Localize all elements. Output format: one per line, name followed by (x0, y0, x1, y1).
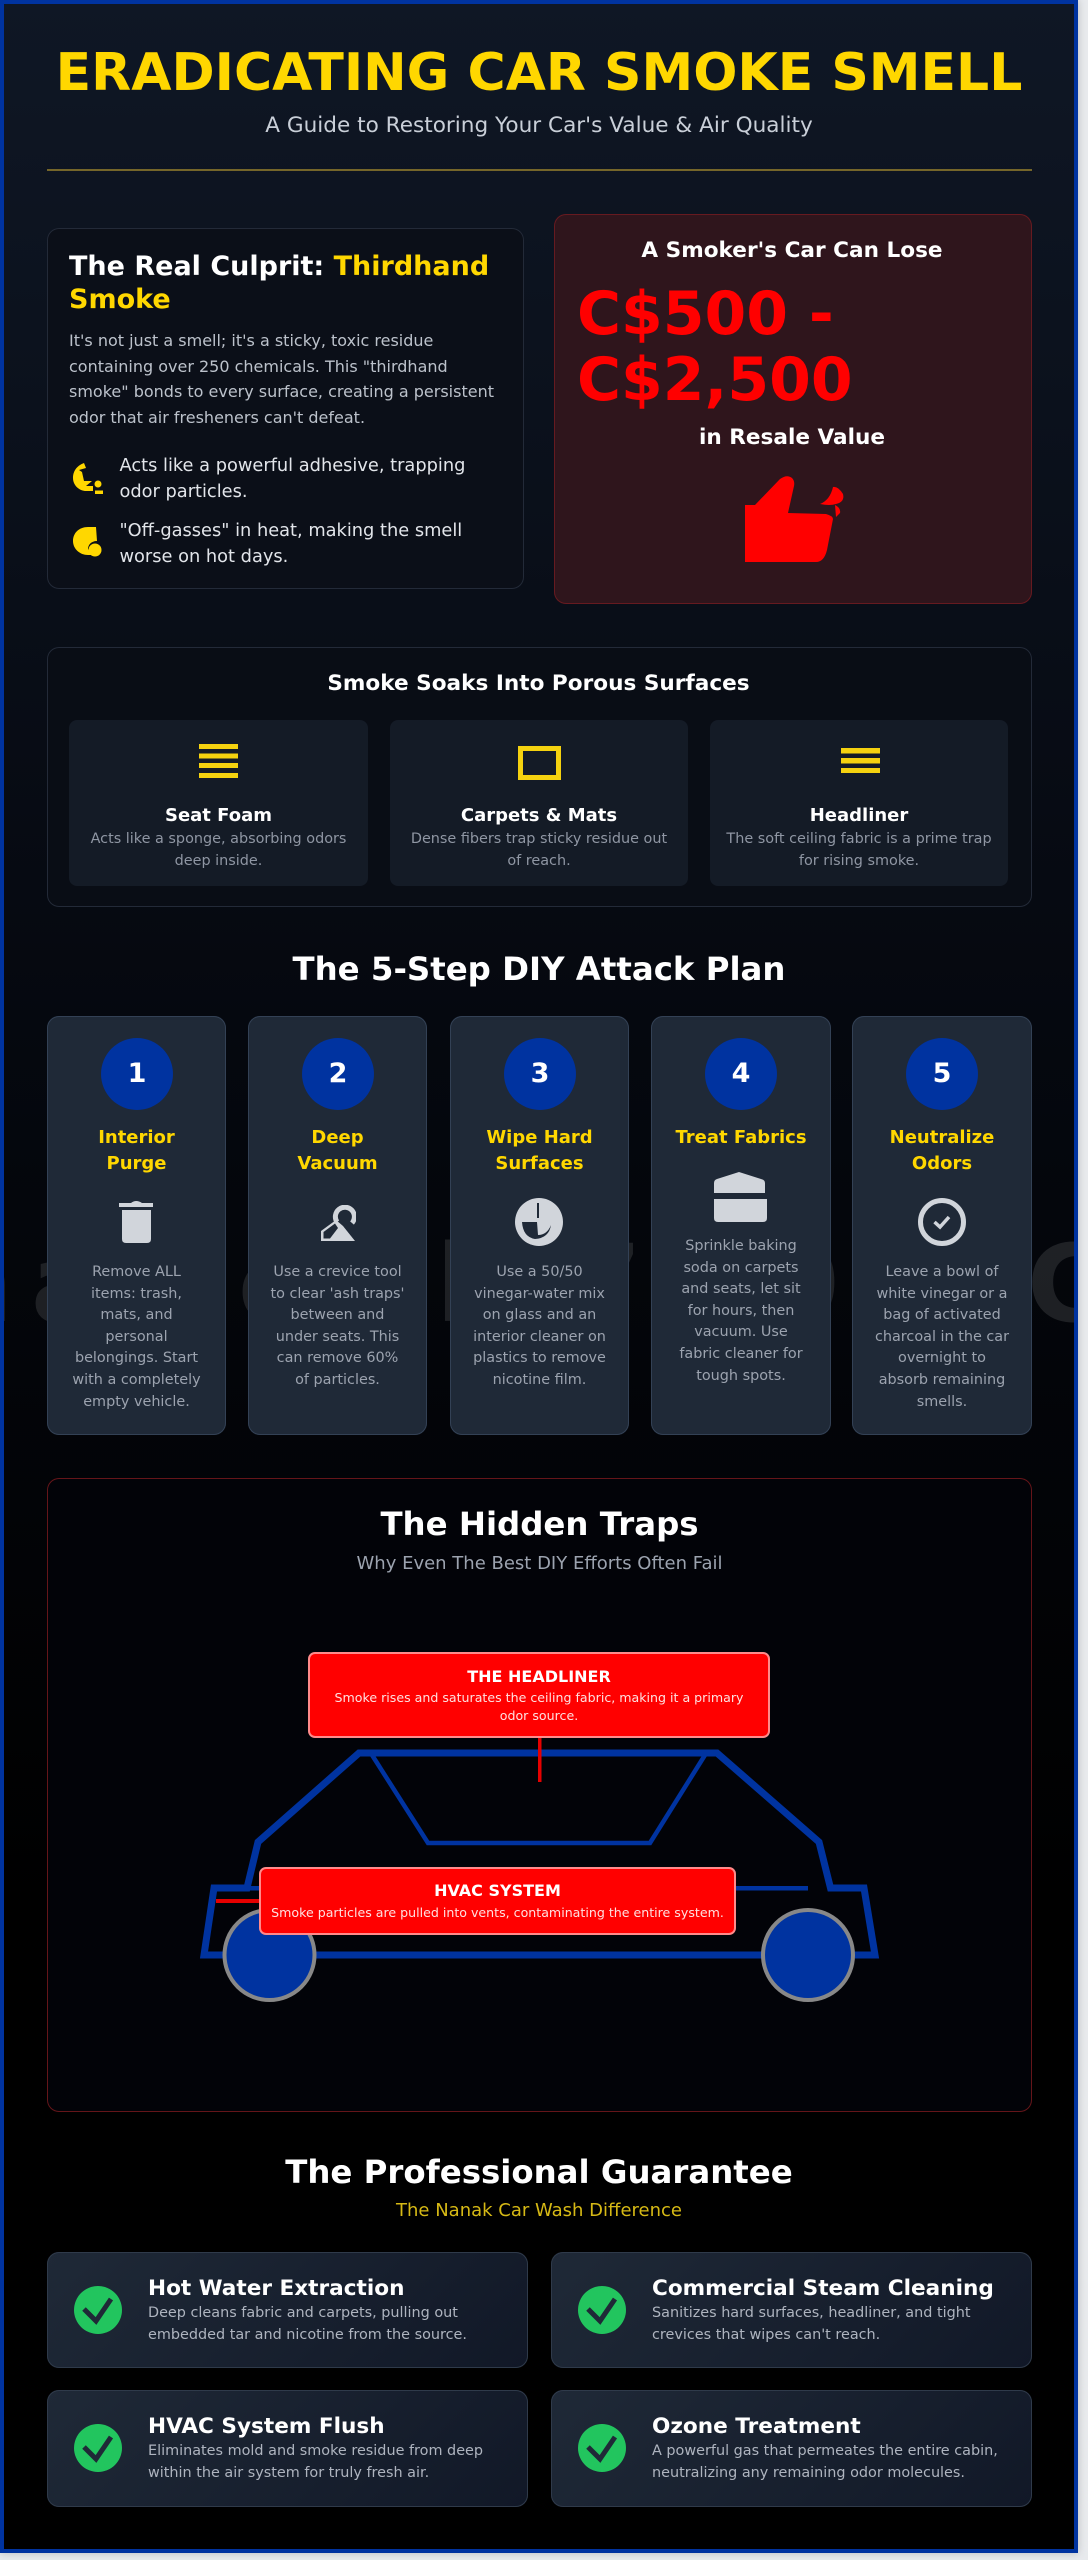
background watermark: h (436, 1223, 512, 1347)
big stat: C$500 - (577, 279, 834, 349)
guarantee subtitle: The Nanak Car Wash Difference (396, 2200, 682, 2221)
step 3 text: vinegar-water mix (474, 1286, 605, 1302)
step 3 text: interior cleaner on (473, 1329, 606, 1345)
step 2 text (270, 1264, 405, 1388)
headliner title: Headliner (810, 805, 908, 826)
step 4 text: soda on carpets (683, 1260, 799, 1276)
steam text (652, 2305, 970, 2343)
step 2 text: can remove 60% (277, 1350, 398, 1366)
culprit paragraph (69, 331, 494, 426)
step 5 title: Neutralize (890, 1127, 994, 1148)
hvac flush text (148, 2443, 483, 2481)
step 3 text: nicotine film. (493, 1372, 586, 1388)
step 3 title (486, 1127, 593, 1174)
step number 3: 3 (531, 1058, 549, 1089)
heading: hidden traps: The Hidden Traps (380, 1505, 699, 1543)
icon: green check (578, 2424, 626, 2472)
panel: hidden traps (47, 1478, 1032, 2112)
step 5 text: overnight to (898, 1350, 986, 1366)
ozone text: A powerful gas that permeates the entire cabin, (652, 2443, 998, 2459)
background watermark: 0 (765, 1223, 839, 1347)
icon: foam layers (199, 744, 238, 778)
hot water text (148, 2305, 467, 2343)
hot water text: embedded tar and nicotine from the source. (148, 2327, 467, 2343)
carpets text (411, 831, 667, 869)
stat label bottom: in Resale Value (699, 425, 885, 450)
step number 1: 1 (128, 1058, 146, 1089)
step 1 text: personal (105, 1329, 168, 1345)
icon: trash can (119, 1201, 153, 1243)
headliner callout text (335, 1690, 744, 1723)
icon: check circle (918, 1198, 966, 1246)
headliner pointer (538, 1738, 542, 1782)
step 2 text: Use a crevice tool (273, 1264, 402, 1280)
step 1 text: Remove ALL (92, 1264, 181, 1280)
step 5 title (890, 1127, 994, 1174)
door line (250, 1886, 808, 1890)
step 4 text: vacuum. Use (694, 1324, 788, 1340)
panel: resale value loss (554, 214, 1032, 604)
hot water title: Hot Water Extraction (148, 2276, 404, 2301)
step number 3 (504, 1038, 576, 1110)
heading: thirdhand smoke: The Real Culprit: Thirdhand (69, 251, 489, 282)
step number 2: 2 (329, 1058, 347, 1089)
icon: carpet rectangle (518, 746, 561, 780)
adhesive text (120, 455, 465, 502)
step 5 text: Leave a bowl of (886, 1264, 998, 1280)
step 5 card (852, 1016, 1032, 1435)
step 1 text: mats, and (100, 1307, 173, 1323)
heading: thirdhand smoke (69, 251, 489, 315)
hvac flush text: Eliminates mold and smoke residue from deep (148, 2443, 483, 2459)
ozone title: Ozone Treatment (652, 2414, 861, 2439)
seat foam title: Seat Foam (165, 805, 272, 826)
step 2 text: under seats. This (276, 1329, 399, 1345)
heading: thirdhand smoke: Smoke (69, 284, 171, 315)
steam title: Commercial Steam Cleaning (652, 2276, 994, 2301)
callout: hvac (259, 1867, 736, 1935)
seat foam text: deep inside. (175, 853, 262, 869)
step 1 title (98, 1127, 175, 1174)
hvac flush title: HVAC System Flush (148, 2414, 385, 2439)
hvac callout title: HVAC SYSTEM (434, 1881, 561, 1900)
step number 5: 5 (933, 1058, 951, 1089)
card: hvac flush (47, 2390, 528, 2507)
hvac pointer (216, 1899, 260, 1903)
headliner callout title: THE HEADLINER (467, 1667, 611, 1686)
step 3 title: Wipe Hard (486, 1127, 593, 1148)
bullet: adhesive (73, 455, 465, 502)
icon: green check (578, 2286, 626, 2334)
carpets title: Carpets & Mats (461, 805, 617, 826)
front wheel (224, 1910, 314, 2000)
step 5 text (875, 1264, 1010, 1410)
rear wheel (763, 1910, 853, 2000)
heading: porous surfaces: Smoke Soaks Into Porous Surfaces (327, 671, 750, 696)
step 4 text: for hours, then (688, 1303, 794, 1319)
car diagram (200, 1738, 880, 2002)
culprit paragraph: odor that air fresheners can't defeat. (69, 408, 365, 426)
step 1 text: belongings. Start (75, 1350, 198, 1366)
step 5 text: white vinegar or a (876, 1286, 1008, 1302)
step 1 title: Interior (98, 1127, 175, 1148)
title: ERADICATING CAR SMOKE SMELL (56, 43, 1022, 103)
step 5 text: bag of activated (883, 1307, 1001, 1323)
icon: headliner layers (841, 748, 880, 773)
step 1 text: with a completely (72, 1372, 201, 1388)
steam text: crevices that wipes can't reach. (652, 2327, 880, 2343)
step 3 text: plastics to remove (473, 1350, 606, 1366)
step 4 text: and seats, let sit (681, 1281, 801, 1297)
icon: fabric sprinkle box (714, 1172, 767, 1222)
step 3 text (473, 1264, 606, 1388)
hvac flush text: within the air system for truly fresh air. (148, 2465, 429, 2481)
step 4 text (679, 1238, 803, 1384)
step 5 title: Odors (912, 1153, 972, 1174)
hvac callout text: Smoke particles are pulled into vents, contaminating the entire system. (271, 1905, 724, 1920)
carpets text: Dense fibers trap sticky residue out (411, 831, 667, 847)
heading: professional guarantee: The Professional Guarantee (285, 2153, 793, 2191)
step 4 text: tough spots. (696, 1368, 786, 1384)
step 3 text: Use a 50/50 (496, 1264, 583, 1280)
headliner callout text: odor source. (500, 1708, 578, 1723)
step 1 text (72, 1264, 201, 1410)
background watermark: a (31, 1223, 103, 1347)
adhesive text: Acts like a powerful adhesive, trapping (120, 455, 465, 476)
carpets text: of reach. (507, 853, 571, 869)
hot water text: Deep cleans fabric and carpets, pulling out (148, 2305, 458, 2321)
step number 4: 4 (732, 1058, 750, 1089)
background watermark: o (238, 1223, 312, 1347)
panel: the real culprit (47, 228, 524, 589)
big stat (577, 279, 853, 415)
step 2 text: to clear 'ash traps' (270, 1286, 405, 1302)
hidden traps subtitle: Why Even The Best DIY Efforts Often Fail (356, 1553, 722, 1574)
off-gassing text: "Off-gasses" in heat, making the smell (120, 520, 462, 541)
headliner text (726, 831, 992, 869)
off-gassing text (120, 520, 462, 566)
culprit paragraph: It's not just a smell; it's a sticky, toxic residue (69, 331, 433, 350)
step number 2 (302, 1038, 374, 1110)
card: carpets and mats (390, 720, 688, 886)
step 1 text: items: trash, (91, 1286, 182, 1302)
icon: thumbs down value (745, 476, 844, 562)
big stat: C$2,500 (577, 345, 853, 415)
icon: wipe dial (515, 1198, 563, 1246)
card: seat foam (69, 720, 368, 886)
seat foam text: Acts like a sponge, absorbing odors (91, 831, 346, 847)
step 4 title: Treat Fabrics (675, 1127, 807, 1148)
car body outline (204, 1753, 875, 1955)
step 3 title: Surfaces (495, 1153, 584, 1174)
step 1 title: Purge (106, 1153, 166, 1174)
step 4 card (651, 1016, 831, 1435)
headliner text: The soft ceiling fabric is a prime trap (726, 831, 992, 847)
icon: green check (74, 2424, 122, 2472)
steam text: Sanitizes hard surfaces, headliner, and tight (652, 2305, 970, 2321)
card: headliner (710, 720, 1008, 886)
card: commercial steam (551, 2252, 1032, 2368)
step number 5 (906, 1038, 978, 1110)
step 2 title (297, 1127, 378, 1174)
callout: headliner (308, 1652, 770, 1738)
off-gassing text: worse on hot days. (120, 546, 288, 566)
icon: green check (74, 2286, 122, 2334)
icon: adhesive droplet (73, 463, 103, 494)
ozone text: neutralizing any remaining odor molecules. (652, 2465, 965, 2481)
car window (372, 1755, 705, 1843)
step 2 title: Deep (311, 1127, 364, 1148)
step 5 text: charcoal in the car (875, 1329, 1009, 1345)
step 4 text: Sprinkle baking (685, 1238, 797, 1254)
ozone text (652, 2443, 998, 2481)
step 2 text: between and (291, 1307, 384, 1323)
step 2 card (248, 1016, 427, 1435)
stat label top: A Smoker's Car Can Lose (641, 238, 943, 263)
step 1 text: empty vehicle. (83, 1394, 190, 1410)
bullet: off-gassing (73, 520, 462, 566)
headliner text: for rising smoke. (799, 853, 919, 869)
icon: heat blob (73, 527, 102, 556)
step 2 title: Vacuum (297, 1153, 378, 1174)
step 1 card (47, 1016, 226, 1435)
adhesive text: odor particles. (120, 480, 248, 502)
step number 1 (101, 1038, 173, 1110)
subtitle: A Guide to Restoring Your Car's Value & Air Quality (265, 113, 813, 138)
background watermark: 7 (567, 1223, 641, 1347)
step 3 card (450, 1016, 629, 1435)
step number 4 (705, 1038, 777, 1110)
heading: attack plan: The 5-Step DIY Attack Plan (293, 950, 785, 988)
headliner callout text: Smoke rises and saturates the ceiling fabric, making it a primary (335, 1690, 743, 1705)
culprit paragraph: smoke" bonds to every surface, creating a persistent (69, 382, 494, 401)
culprit paragraph: containing over 250 chemicals. This "thirdhand (69, 356, 448, 376)
card: hot water extraction (47, 2252, 528, 2368)
step 5 text: absorb remaining (879, 1372, 1005, 1388)
step 2 text: of particles. (295, 1372, 380, 1388)
step 3 text: on glass and an (483, 1307, 596, 1323)
step 4 text: fabric cleaner for (679, 1346, 803, 1362)
card: ozone treatment (551, 2390, 1032, 2507)
seat foam text (90, 831, 346, 869)
icon: vacuum nozzle (321, 1205, 356, 1241)
step 5 text: smells. (917, 1394, 967, 1410)
panel: porous surfaces (47, 647, 1032, 907)
